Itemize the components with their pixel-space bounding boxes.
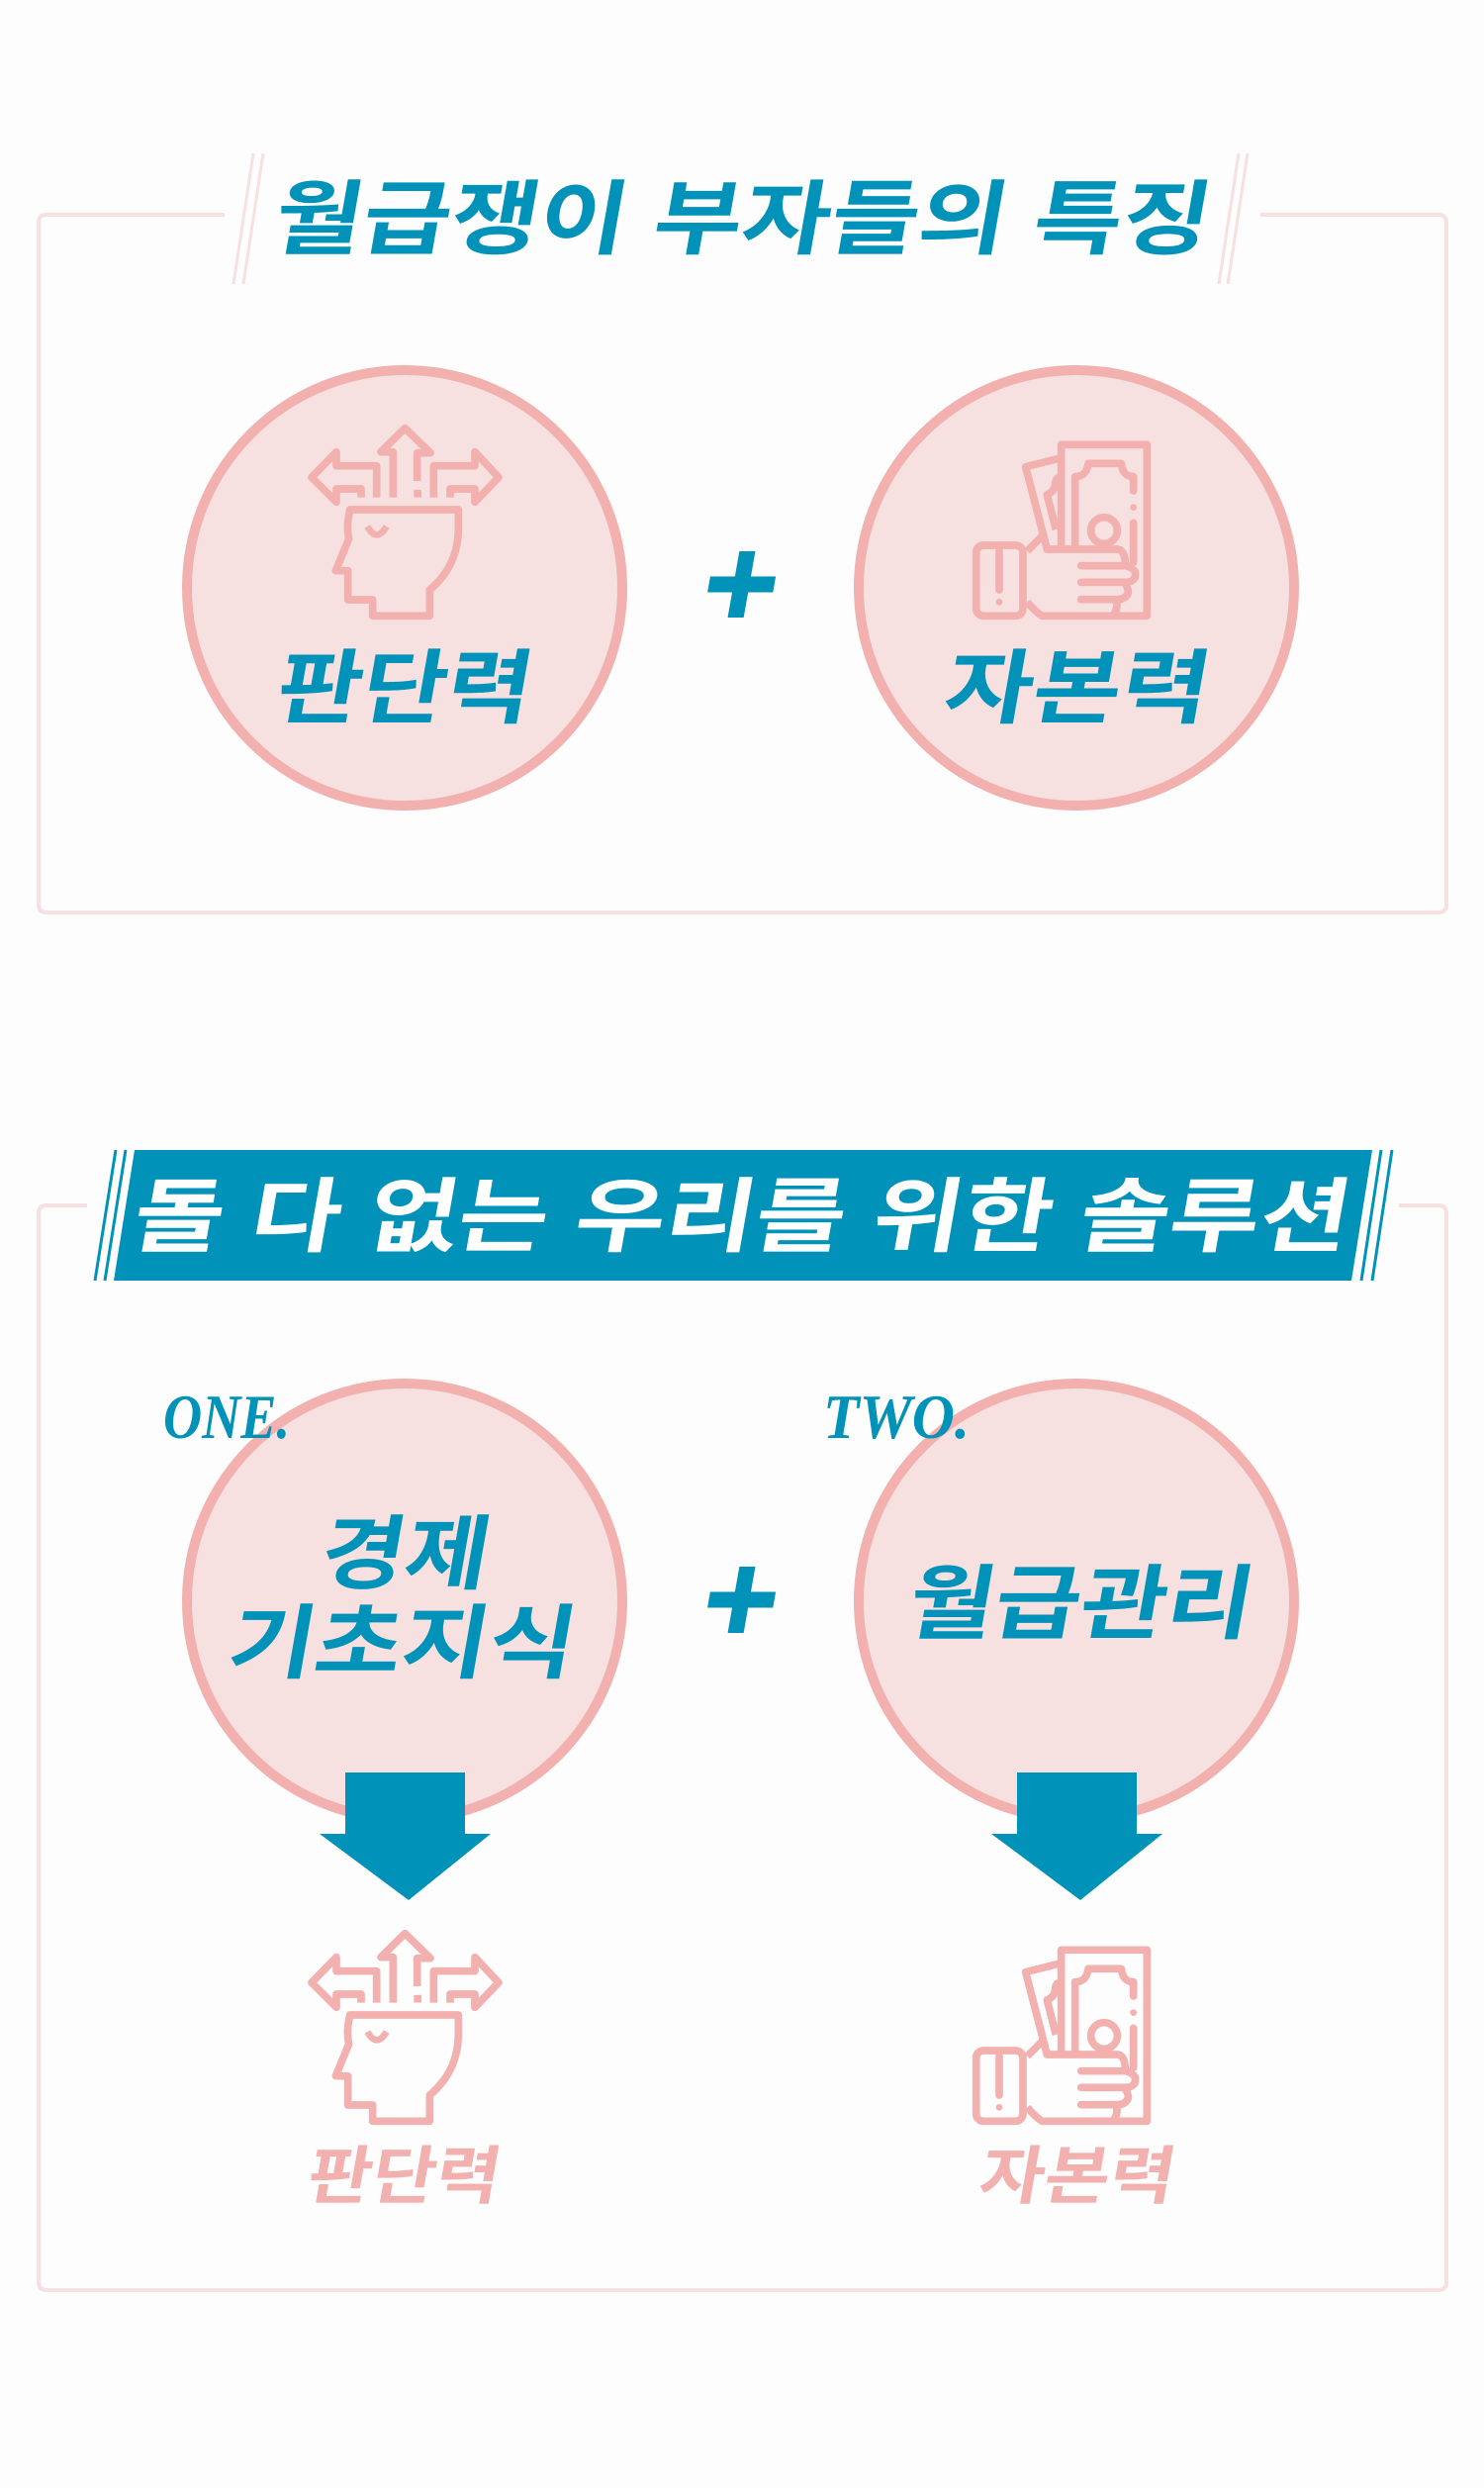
plus sign: bottom: +: [693, 1528, 791, 1670]
label: economics: 경제: [314, 1509, 498, 1600]
label: judgement (bottom): 판단력: [303, 2141, 507, 2212]
panel: judgement circle: [187, 370, 622, 806]
panel: bottom frame: [39, 1205, 1446, 2290]
plus sign: top: +: [693, 513, 791, 654]
left banner slashes: [95, 1150, 126, 1281]
panel: salary management circle: [859, 1384, 1294, 1819]
panel: capital circle: [859, 370, 1294, 806]
title: top: 월급쟁이 부자들의 특징: [267, 174, 1219, 265]
icon: hand holding money: [976, 444, 1147, 616]
label: capital: 자본력: [938, 643, 1218, 734]
banner heading: 돌 다 없는 우리를 위한 솔루션: [127, 1172, 1358, 1263]
label: capital (bottom): 자본력: [974, 2141, 1181, 2212]
label: ONE: ONE.: [163, 1382, 290, 1452]
icon: head with arrows (bottom): [312, 1934, 499, 2121]
label: judgement: 판단력: [270, 643, 540, 734]
icon: hand holding money (bottom): [976, 1950, 1147, 2121]
left title slashes: [233, 153, 263, 284]
banner: [114, 1150, 1372, 1281]
panel: top frame: [39, 215, 1446, 912]
label: salary management: 월급관리: [901, 1559, 1261, 1650]
label: basic knowledge: 기초지식: [222, 1598, 584, 1689]
icon: head with arrows: [312, 429, 499, 616]
arrow: right down: [991, 1772, 1162, 1900]
arrow: left down: [320, 1772, 491, 1900]
label: TWO: TWO.: [823, 1382, 970, 1452]
panel: economics circle: [187, 1384, 622, 1819]
right banner slashes: [1361, 1150, 1392, 1281]
right title slashes: [1219, 153, 1248, 284]
